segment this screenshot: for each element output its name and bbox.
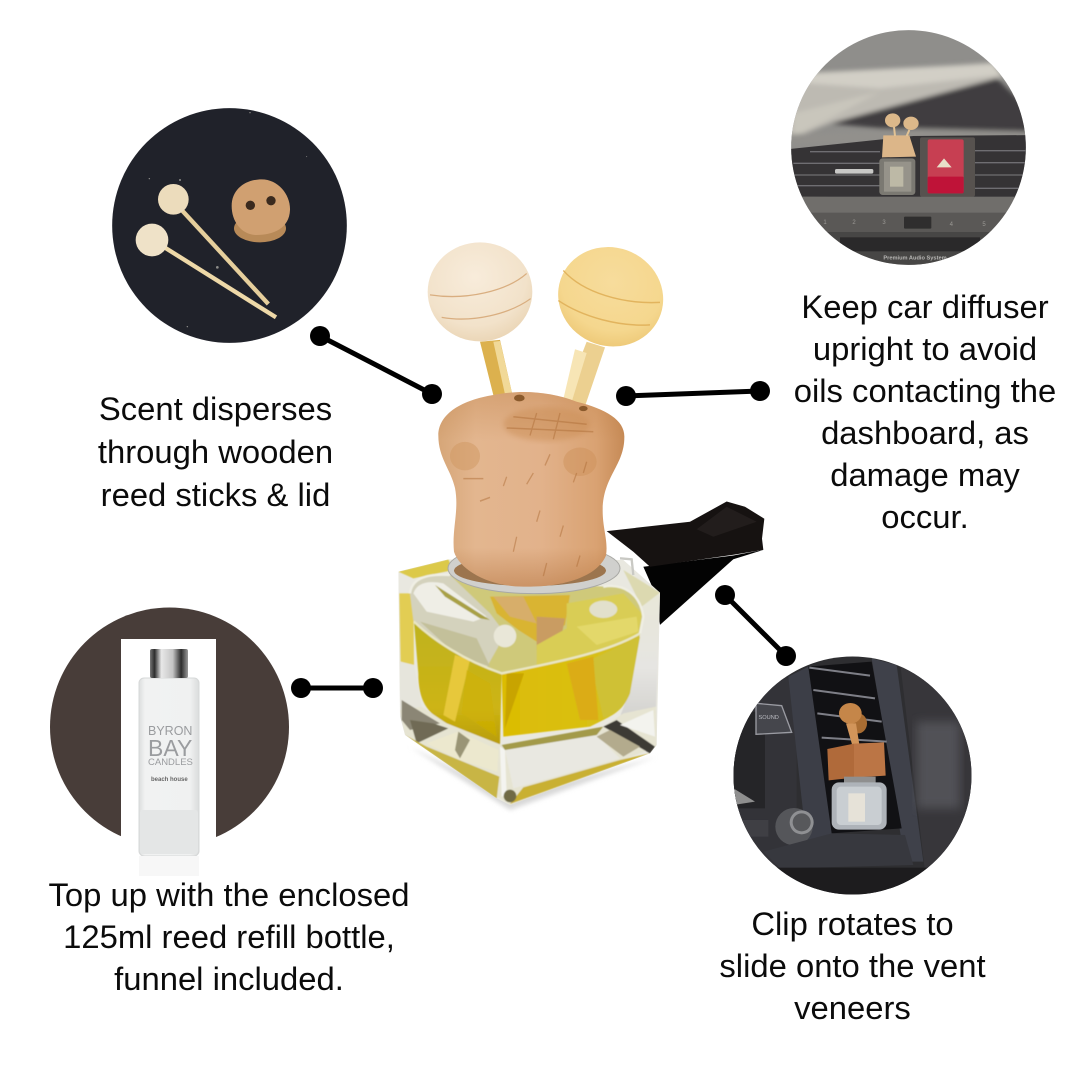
connector: clip bbox=[715, 585, 796, 666]
small diffuser bbox=[879, 113, 919, 195]
reed one bbox=[158, 184, 268, 304]
hazard button bbox=[920, 137, 975, 197]
submerged reeds bbox=[443, 655, 470, 722]
vent frame bbox=[788, 667, 832, 840]
caption: reed sticks: through wooden bbox=[98, 433, 333, 470]
caption: keep upright: Keep car diffuser bbox=[801, 288, 1049, 325]
bottle label: CANDLES bbox=[148, 757, 193, 768]
caption: clip: Clip rotates to bbox=[751, 905, 954, 942]
caption: clip: slide onto the vent bbox=[719, 947, 986, 984]
oil right bbox=[502, 633, 640, 737]
droplets bbox=[494, 625, 516, 647]
photo: diffuser on dashboard: Premium Audio System bbox=[883, 255, 947, 261]
connector: upright bbox=[616, 381, 770, 406]
photo: diffuser on vent: SOUND bbox=[758, 715, 779, 721]
caption: keep upright: damage may bbox=[830, 456, 1020, 493]
caption: keep upright: oils contacting the bbox=[794, 372, 1056, 409]
caption: refill bottle: 125ml reed refill bottle, bbox=[63, 918, 395, 955]
clip bbox=[607, 502, 764, 625]
lower buttons bbox=[802, 196, 1015, 214]
base bbox=[400, 707, 657, 805]
caption: clip: veneers bbox=[794, 989, 911, 1026]
caption: reed sticks: reed sticks & lid bbox=[101, 476, 330, 513]
caption: keep upright: dashboard, as bbox=[821, 414, 1029, 451]
photo: diffuser on dashboard bbox=[791, 30, 1026, 265]
bottle label: BYRON bbox=[148, 724, 192, 738]
bottle label: beach house bbox=[151, 777, 188, 783]
reed ball yellow bbox=[552, 239, 669, 354]
photo: refill bottle bbox=[50, 608, 289, 879]
vents panel bbox=[780, 135, 1040, 198]
photo: diffuser on dashboard: 5 bbox=[982, 222, 986, 228]
photo: diffuser on vent bbox=[734, 656, 972, 894]
small diffuser bbox=[827, 703, 887, 830]
photo: wooden reeds and lid bbox=[112, 108, 347, 343]
glass jar bbox=[398, 554, 660, 811]
left control panel bbox=[734, 678, 784, 865]
photo: diffuser on dashboard: 3 bbox=[882, 220, 886, 226]
product: car diffuser bbox=[390, 239, 764, 810]
caption: keep upright: occur. bbox=[881, 498, 969, 535]
reed two bbox=[136, 224, 276, 317]
metal collar bbox=[448, 543, 633, 594]
right blurred background bbox=[900, 666, 972, 870]
connector: reed sticks bbox=[310, 326, 442, 404]
bottle label: BAY bbox=[148, 735, 192, 761]
knob bbox=[775, 808, 814, 845]
windscreen light band bbox=[780, 63, 1040, 145]
photo: diffuser on dashboard: 4 bbox=[950, 222, 954, 228]
photo: diffuser on dashboard: 2 bbox=[852, 220, 856, 226]
top and left walls bbox=[398, 559, 453, 578]
wooden lid bbox=[438, 392, 624, 587]
caption: refill bottle: funnel included. bbox=[114, 960, 344, 997]
caption: reed sticks: Scent disperses bbox=[99, 390, 332, 427]
photo: diffuser on dashboard: 1 bbox=[823, 220, 827, 226]
lid in photo bbox=[232, 179, 290, 242]
right wall bbox=[620, 593, 660, 717]
reed sticks bbox=[480, 340, 605, 411]
bottle label bbox=[148, 724, 193, 783]
reed ball cream bbox=[428, 242, 532, 341]
bottle bbox=[139, 649, 199, 876]
oil top outline bbox=[414, 622, 640, 673]
oil left bbox=[414, 622, 502, 745]
caption: refill bottle: Top up with the enclosed bbox=[48, 876, 410, 913]
caption: keep upright: upright to avoid bbox=[813, 330, 1037, 367]
shoulder glass bbox=[450, 575, 642, 673]
bottom panel bbox=[777, 834, 913, 868]
connector: refill bbox=[291, 678, 383, 698]
